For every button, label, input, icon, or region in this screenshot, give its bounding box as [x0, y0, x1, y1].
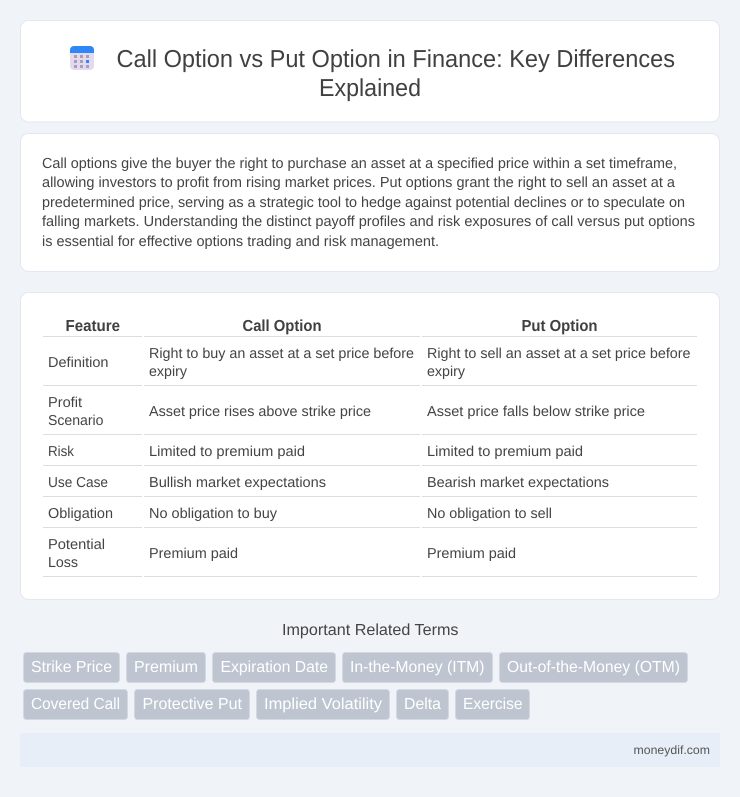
row: potential loss [48, 537, 516, 571]
row: risk: Limited to premium paid [149, 444, 305, 460]
panel: comparison table [20, 292, 720, 600]
panel: header [20, 20, 720, 122]
row: profit scenario [48, 395, 645, 429]
tag: covered call [24, 690, 128, 720]
row: profit scenario: Scenario [48, 413, 104, 429]
tag list [24, 652, 688, 720]
footer band [20, 733, 720, 767]
row: profit scenario: Asset price falls below strike price [427, 404, 645, 420]
table header row [66, 318, 598, 335]
tag: exercise [456, 690, 530, 720]
tag: premium [126, 652, 206, 682]
tag: out-of-the-money: Out-of-the-Money (OTM) [507, 659, 680, 676]
table header row: Feature [66, 318, 120, 335]
row: risk: Risk [48, 444, 75, 460]
footer source text: moneydif.com [634, 743, 710, 757]
tag: strike price: Strike Price [31, 659, 112, 676]
row: profit scenario: Asset price rises above strike price [149, 404, 371, 420]
row: obligation: Obligation [48, 506, 113, 522]
row: potential loss: Premium paid [149, 546, 238, 562]
row: definition: expiry [149, 364, 188, 380]
tag: delta [396, 690, 448, 720]
row: obligation [48, 506, 552, 522]
tag: in-the-money: In-the-Money (ITM) [350, 659, 484, 676]
row: obligation: No obligation to buy [149, 506, 278, 522]
row: risk [48, 444, 583, 460]
tag: implied volatility [256, 690, 390, 720]
row: use case: Bearish market expectations [427, 475, 609, 491]
row: definition: expiry [427, 364, 466, 380]
table header row: Put Option [522, 318, 598, 335]
row: definition [48, 346, 690, 380]
row: risk: Limited to premium paid [427, 444, 583, 460]
tag: premium: Premium [134, 659, 198, 676]
row: use case: Use Case [48, 475, 108, 491]
tag: strike price [24, 652, 120, 682]
text block: summary: is essential for effective options trading and risk management. [42, 234, 439, 250]
row: potential loss: Potential [48, 537, 105, 553]
tag: out-of-the-money [500, 652, 688, 682]
text block: summary: falling markets. Understanding the distinct payoff profiles and risk exposures of call versus put options [42, 214, 695, 230]
row: potential loss: Premium paid [427, 546, 516, 562]
row: definition: Definition [48, 355, 108, 371]
row: obligation: No obligation to sell [427, 506, 552, 522]
row: use case [48, 475, 609, 491]
row: definition: Right to buy an asset at a set price before [149, 346, 414, 362]
text block: summary: allowing investors to profit from rising market prices. Put options grant the right to sell an asset at a [42, 175, 676, 191]
heading: important related terms: Important Related Terms [282, 622, 458, 639]
tag: expiration date [212, 652, 336, 682]
row: definition: Right to sell an asset at a set price before [427, 346, 690, 362]
text block: summary [42, 156, 695, 250]
row: profit scenario: Profit [48, 395, 82, 411]
text block: summary: Call options give the buyer the right to purchase an asset at a specified price within a set timeframe, [42, 156, 677, 172]
row: potential loss: Loss [48, 555, 78, 571]
tag: protective put: Protective Put [142, 696, 243, 713]
tag: protective put [134, 690, 250, 720]
tag: covered call: Covered Call [31, 696, 120, 713]
icon: calendar [70, 46, 94, 70]
tag: implied volatility: Implied Volatility [264, 696, 382, 713]
row: use case: Bullish market expectations [149, 475, 326, 491]
tag: expiration date: Expiration Date [220, 659, 328, 676]
tag: exercise: Exercise [463, 696, 523, 713]
tag: in-the-money [342, 652, 492, 682]
table header row: Call Option [242, 318, 322, 335]
tag: delta: Delta [404, 696, 441, 713]
title [116, 46, 675, 102]
text block: summary: predetermined price, serving as a strategic tool to hedge against potential declines or to speculate on [42, 195, 685, 211]
title: Call Option vs Put Option in Finance: Key Differences [116, 46, 675, 73]
title: Explained [319, 75, 421, 102]
panel: summary paragraph [20, 134, 720, 272]
